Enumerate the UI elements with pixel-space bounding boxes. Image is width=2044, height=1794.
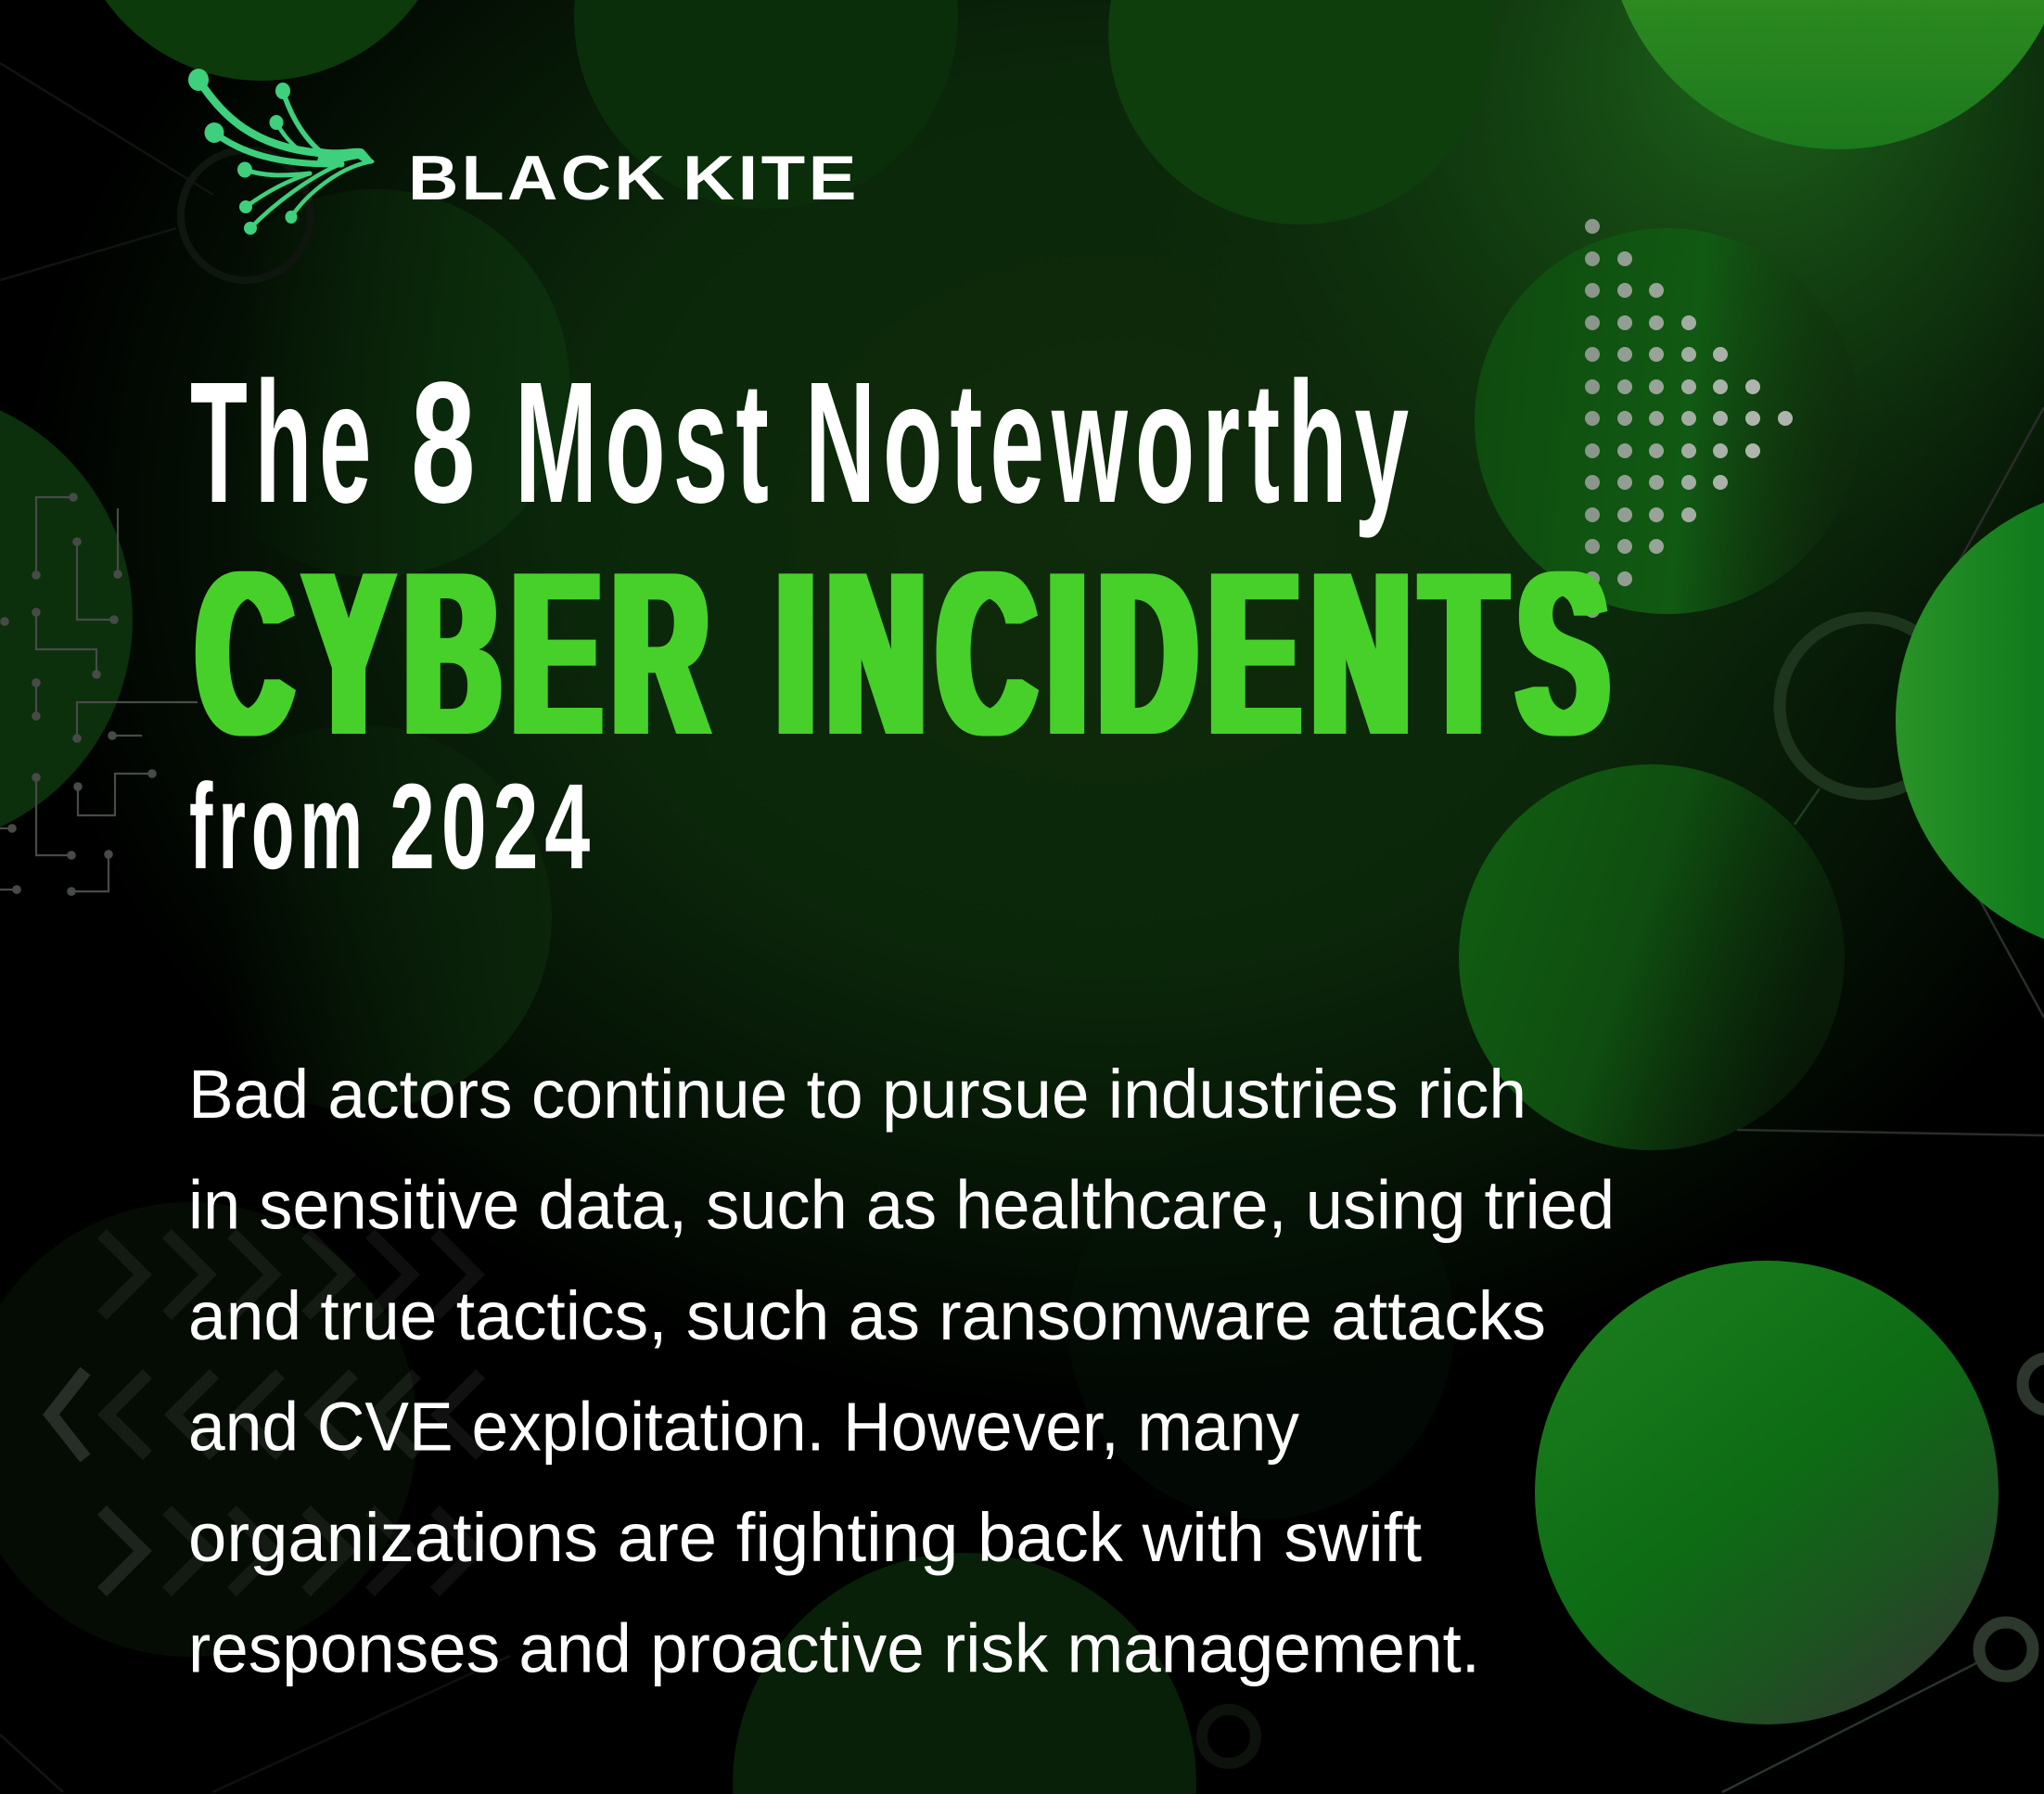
body paragraph: organizations are fighting back with swift [188, 1499, 1422, 1576]
ring: bottom right upper [2023, 1358, 2044, 1410]
body paragraph: and CVE exploitation. However, many [188, 1388, 1299, 1466]
body paragraph: Bad actors continue to pursue industries rich [188, 1056, 1527, 1133]
ring: top left [181, 150, 311, 280]
title line 3: from [189, 758, 368, 894]
title line 1: 8 [411, 347, 484, 539]
body paragraph: in sensitive data, such as healthcare, using tried [188, 1167, 1615, 1243]
icon: kite mark [188, 69, 375, 235]
wordmark: BLACK [408, 143, 668, 213]
title [189, 347, 1621, 894]
title line 1: The [190, 347, 378, 539]
circle: right edge [1896, 486, 2044, 955]
title line 2 [198, 524, 1621, 784]
body paragraph: responses and proactive risk management. [188, 1610, 1480, 1686]
title line 3: 2024 [390, 758, 596, 894]
body paragraph [188, 1056, 1615, 1686]
wordmark: KITE [683, 143, 860, 213]
dotted arrow [1585, 219, 1793, 618]
body paragraph: and true tactics, such as ransomware attacks [188, 1277, 1546, 1354]
circle: top right [1606, 0, 2044, 149]
ring: bottom middle [1202, 1710, 1256, 1763]
chevron pattern [51, 1234, 480, 1592]
title line 2: CYBER [198, 524, 721, 784]
logo: Black Kite [188, 69, 860, 235]
circuit pattern [0, 493, 198, 896]
ring: bottom right lower [1979, 1622, 2033, 1676]
ring: right behind circle [1780, 618, 1956, 794]
title line 1: Most [515, 347, 776, 539]
wordmark [408, 143, 860, 213]
title line 1: Noteworthy [805, 347, 1416, 539]
title line 1 [190, 347, 1416, 539]
circle: bottom right [1535, 1261, 1999, 1724]
